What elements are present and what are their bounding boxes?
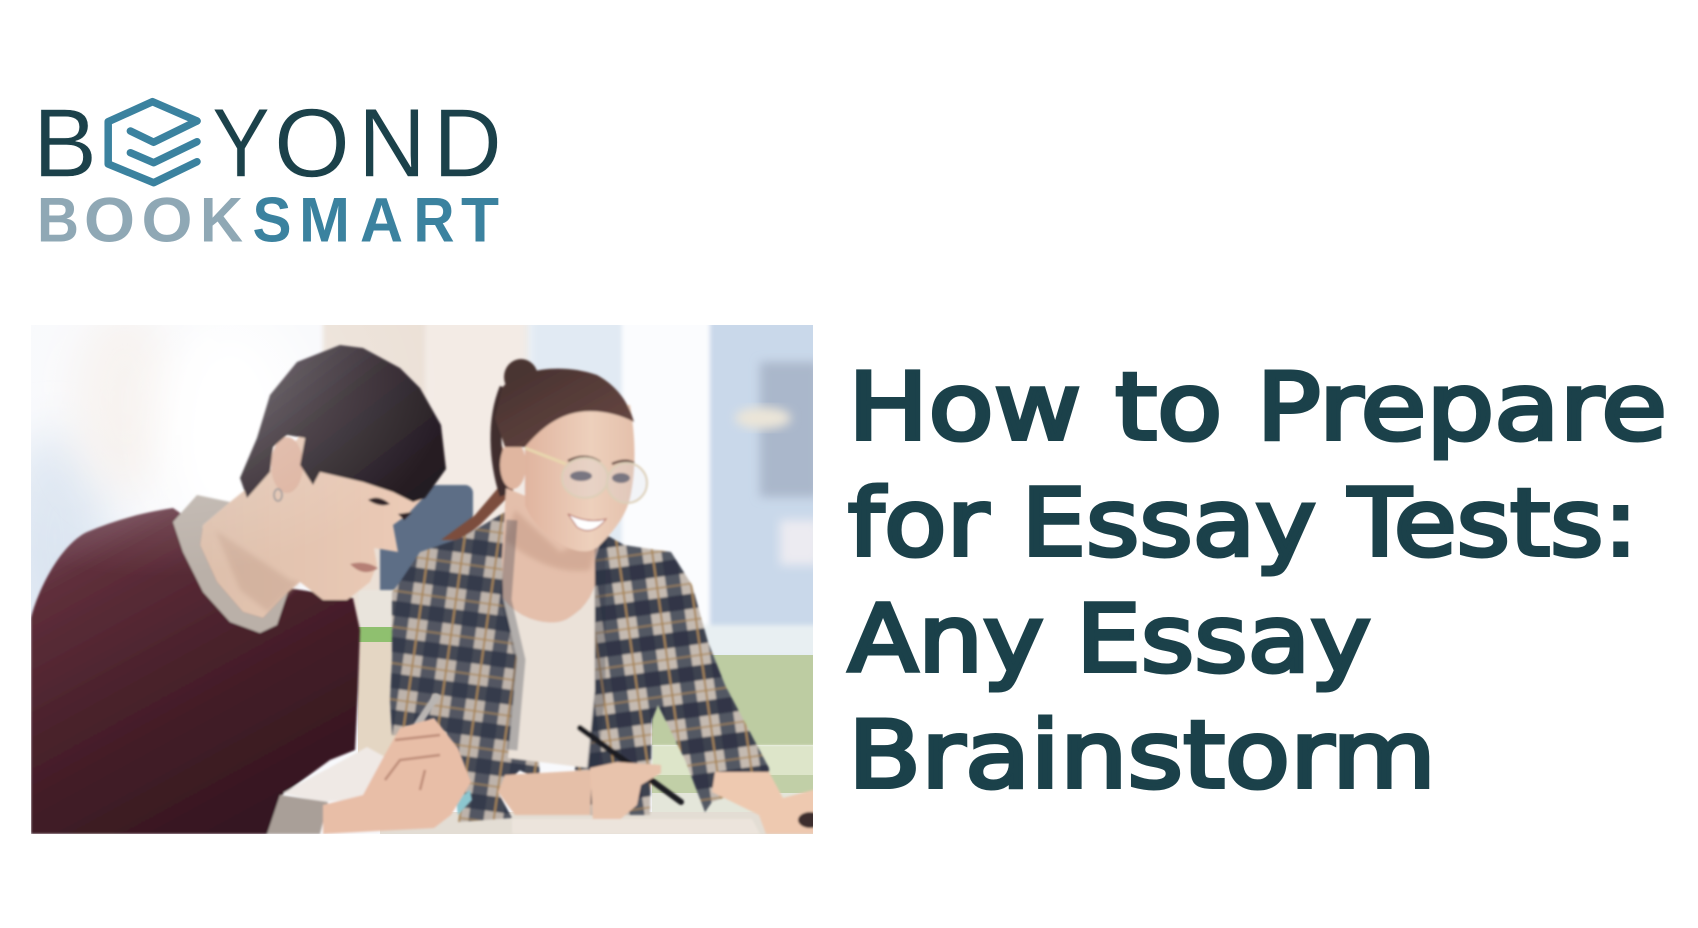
- right student plaid shirt, right side: [575, 533, 769, 815]
- neck shadow under chin: [505, 510, 600, 571]
- logo wordmark: BOOK: [37, 186, 243, 256]
- student on the right: plaid shirt: [390, 359, 822, 834]
- title: Any Essay: [848, 585, 1371, 693]
- photo light haze: [75, 344, 418, 554]
- right student glasses: [525, 448, 647, 503]
- teal object under hands: [456, 790, 472, 815]
- logo wordmark: SMART: S: [252, 186, 292, 256]
- logo wordmark: BEYOND: O: [274, 89, 350, 198]
- logo wordmark: BEYOND: [33, 89, 502, 198]
- logo wordmark: SMART: M: [299, 186, 350, 256]
- right student neck and chest: [502, 488, 603, 623]
- logo wordmark: BEYOND: Y: [212, 89, 270, 198]
- right student hair bun: [502, 357, 538, 386]
- title: for Essay Tests:: [848, 469, 1638, 577]
- logo wordmark: SMART: A: [360, 186, 403, 256]
- left student shirt collar: [173, 495, 288, 633]
- logo wordmark: SMART: R: [414, 186, 454, 256]
- right student braid: [496, 388, 505, 495]
- left student notebook: [283, 747, 387, 802]
- left student neck and face: [200, 436, 423, 618]
- left student hair: [240, 345, 446, 502]
- left student hands: [323, 718, 471, 834]
- logo wordmark: BEYOND: N: [358, 89, 426, 198]
- left student earring: [274, 489, 282, 501]
- right student forearm: [498, 770, 592, 815]
- logo wordmark: SMART: T: [461, 186, 499, 256]
- right student other arm and hand: [712, 772, 820, 834]
- logo wordmark: SMART: [252, 186, 499, 256]
- right student face: [525, 400, 634, 551]
- right student ear: [500, 441, 526, 489]
- title: How to Prepare: [848, 353, 1667, 461]
- photo: two students working together at a table: [0, 310, 825, 834]
- title: [848, 353, 1667, 809]
- left student silver pen: [417, 697, 436, 725]
- left student finger creases: [385, 735, 440, 790]
- title: Brainstorm: [848, 701, 1436, 809]
- left student sleeve cuff: [267, 795, 328, 834]
- logo wordmark: BOOK: O: [84, 186, 135, 256]
- logo: Beyond BookSmart: [33, 89, 502, 256]
- logo wordmark: BOOK: K: [200, 186, 243, 256]
- right student white t-shirt: [503, 585, 595, 768]
- right student pen: [580, 728, 681, 802]
- right student hair: [495, 369, 634, 447]
- left student ear: [271, 437, 303, 493]
- right student hand holding pen: [590, 762, 661, 822]
- logo wordmark: BOOK: B: [37, 186, 79, 256]
- left student eyes and lips: [350, 498, 412, 572]
- photo background: bright window and column: [0, 310, 825, 834]
- notebook on table: [512, 819, 760, 834]
- logo wordmark: BOOK: O: [142, 186, 192, 256]
- neck shadow: [219, 536, 300, 610]
- logo icon: hexagon book stack: [108, 102, 197, 183]
- right student eyes and smile: [568, 457, 634, 531]
- logo wordmark: BEYOND: B: [33, 89, 97, 198]
- student on the left: maroon sweater: [31, 345, 472, 834]
- shadow inside right hand: [796, 810, 813, 830]
- right student ponytail: [441, 445, 515, 540]
- right student plaid shirt, left side: [390, 508, 540, 822]
- left student sweater: [31, 508, 360, 834]
- logo wordmark: BEYOND: D: [433, 89, 502, 198]
- shirt placket dark bands: [506, 520, 600, 770]
